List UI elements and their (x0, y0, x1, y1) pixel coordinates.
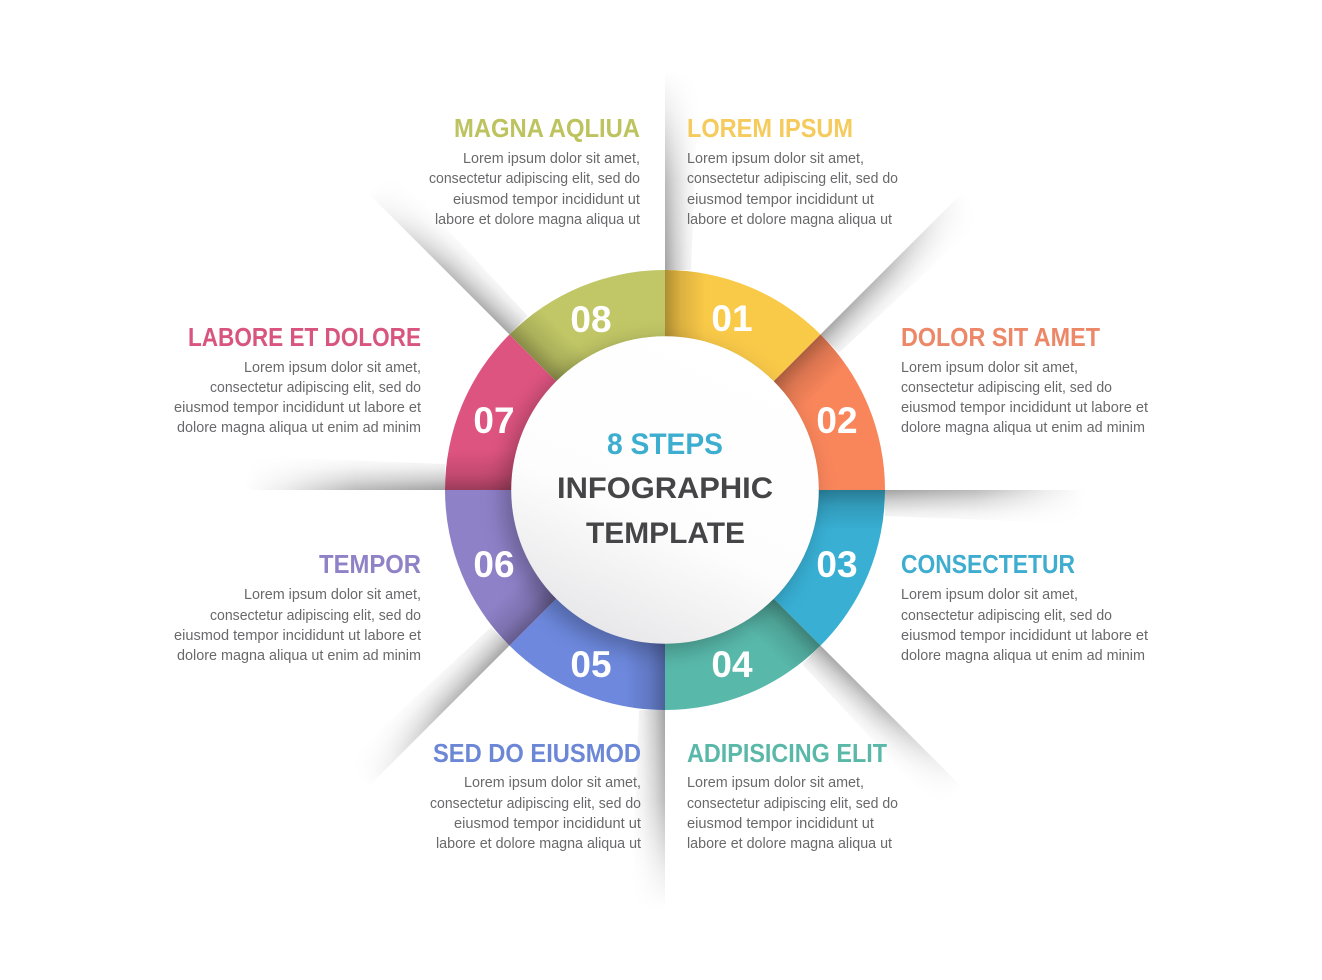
step 04 text: eiusmod tempor incididunt ut (687, 816, 874, 832)
center title (557, 428, 773, 550)
step 07 text: eiusmod tempor incididunt ut labore et (174, 400, 421, 416)
step 03 text: CONSECTETUR (901, 551, 1075, 579)
step 02 text: eiusmod tempor incididunt ut labore et (901, 400, 1148, 416)
radial shadow rays (245, 70, 1085, 910)
step 06 text: Lorem ipsum dolor sit amet, (244, 587, 421, 603)
step 06 text (174, 551, 421, 664)
step 02 text: DOLOR SIT AMET (901, 324, 1100, 352)
step 05 text: consectetur adipiscing elit, sed do (430, 796, 641, 812)
step 04 text: consectetur adipiscing elit, sed do (687, 796, 898, 812)
segment 05 (509, 490, 665, 710)
step 05 text: eiusmod tempor incididunt ut (454, 816, 641, 832)
center title: INFOGRAPHIC (557, 472, 773, 505)
step 04 text: Lorem ipsum dolor sit amet, (687, 775, 864, 791)
segment numbers: 03 (816, 544, 858, 585)
segment 02 (665, 334, 885, 490)
segment numbers: 01 (711, 298, 753, 339)
step 04 text (687, 740, 898, 852)
center circle (511, 336, 819, 644)
segment boundary shading (440, 265, 890, 715)
step 02 text: Lorem ipsum dolor sit amet, (901, 360, 1078, 376)
step 05 text (430, 740, 641, 852)
segment numbers: 05 (570, 644, 612, 685)
step 04 text: labore et dolore magna aliqua ut (687, 836, 892, 852)
step 02 text: dolore magna aliqua ut enim ad minim (901, 420, 1145, 436)
segment numbers (473, 298, 858, 685)
step 03 text (901, 551, 1148, 664)
step 06 text: TEMPOR (319, 551, 421, 579)
step 02 text: consectetur adipiscing elit, sed do (901, 380, 1112, 396)
segment numbers: 08 (570, 299, 612, 340)
step 08 text: MAGNA AQLIUA (454, 115, 640, 143)
segment numbers: 02 (816, 400, 858, 441)
segment 01 (665, 270, 821, 490)
step 08 text: labore et dolore magna aliqua ut (435, 212, 640, 228)
step 04 text: ADIPISICING ELIT (687, 740, 887, 768)
step 03 text: dolore magna aliqua ut enim ad minim (901, 648, 1145, 664)
step 07 text: LABORE ET DOLORE (188, 324, 421, 352)
step 08 text: consectetur adipiscing elit, sed do (429, 171, 640, 187)
step 01 text: Lorem ipsum dolor sit amet, (687, 151, 864, 167)
donut ring of eight segments (445, 270, 885, 710)
step 08 text: eiusmod tempor incididunt ut (453, 192, 640, 208)
step 06 text: eiusmod tempor incididunt ut labore et (174, 628, 421, 644)
segment numbers: 04 (711, 644, 753, 685)
step 06 text: consectetur adipiscing elit, sed do (210, 608, 421, 624)
segment 04 (665, 490, 821, 710)
step 08 text: Lorem ipsum dolor sit amet, (463, 151, 640, 167)
step 02 text (901, 324, 1148, 436)
center title: 8 STEPS (607, 428, 723, 461)
step 08 text (429, 115, 640, 228)
step 01 text: LOREM IPSUM (687, 115, 853, 143)
step 05 text: SED DO EIUSMOD (433, 740, 641, 768)
step 01 text (687, 115, 898, 228)
step 01 text: labore et dolore magna aliqua ut (687, 212, 892, 228)
step 01 text: eiusmod tempor incididunt ut (687, 192, 874, 208)
step 06 text: dolore magna aliqua ut enim ad minim (177, 648, 421, 664)
segment 07 (445, 334, 665, 490)
step 07 text (174, 324, 421, 436)
segment numbers: 06 (473, 544, 515, 585)
segment numbers: 07 (473, 400, 515, 441)
segment 08 (509, 270, 665, 490)
step 05 text: Lorem ipsum dolor sit amet, (464, 775, 641, 791)
step 01 text: consectetur adipiscing elit, sed do (687, 171, 898, 187)
step 03 text: eiusmod tempor incididunt ut labore et (901, 628, 1148, 644)
step 03 text: consectetur adipiscing elit, sed do (901, 608, 1112, 624)
step 05 text: labore et dolore magna aliqua ut (436, 836, 641, 852)
step 07 text: consectetur adipiscing elit, sed do (210, 380, 421, 396)
step 07 text: Lorem ipsum dolor sit amet, (244, 360, 421, 376)
step 03 text: Lorem ipsum dolor sit amet, (901, 587, 1078, 603)
center title: TEMPLATE (586, 517, 745, 550)
segment 06 (445, 490, 665, 646)
step 07 text: dolore magna aliqua ut enim ad minim (177, 420, 421, 436)
segment 03 (665, 490, 885, 646)
